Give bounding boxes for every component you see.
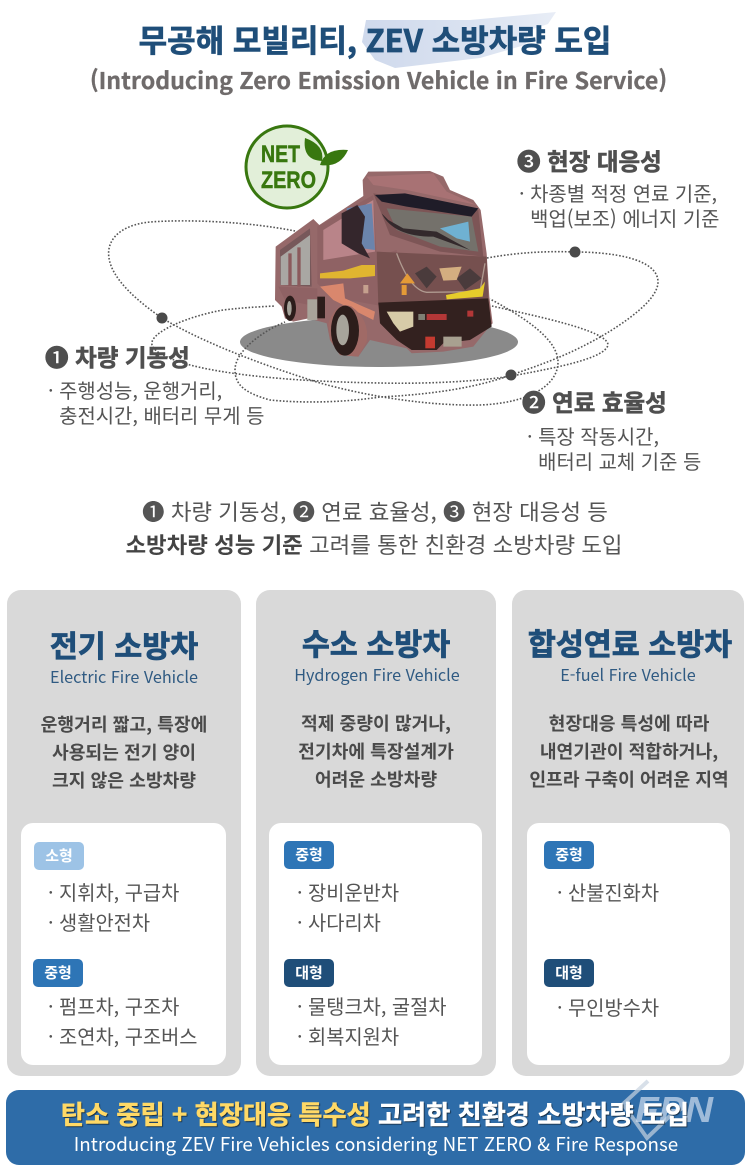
watermark logo: FPN	[635, 1089, 714, 1130]
tag: small: 소형	[45, 845, 73, 866]
e-fuel description: 현장대응 특성에 따라	[549, 710, 709, 736]
tag: large	[544, 959, 594, 987]
e-fuel large list: · 무인방수차	[557, 992, 659, 1021]
e-fuel subtitle: E-fuel Fire Vehicle	[560, 662, 696, 686]
electric description: 사용되는 전기 양이	[52, 739, 196, 765]
tag: medium: 중형	[44, 962, 72, 983]
tag: medium	[33, 959, 83, 987]
electric subtitle: Electric Fire Vehicle	[50, 664, 198, 688]
summary line 2: 소방차량 성능 기준 고려를 통한 친환경 소방차량 도입	[125, 528, 623, 560]
hydrogen list box	[269, 823, 482, 1065]
text 3: 백업(보조) 에너지 기준	[530, 202, 719, 232]
section 3: field response	[517, 143, 719, 232]
net zero badge	[246, 126, 348, 208]
hydrogen large list: · 물탱크차, 굴절차	[297, 991, 447, 1020]
e-fuel medium list: · 산불진화차	[557, 877, 659, 906]
diagram: orbits and fire truck	[108, 124, 659, 406]
text 1: · 주행성능, 운행거리,	[48, 375, 222, 404]
section 1: mobility	[45, 339, 264, 428]
orbit markers	[156, 246, 580, 380]
e-fuel description: 내연기관이 적합하거나,	[540, 738, 718, 764]
electric small list	[48, 877, 179, 936]
hydrogen description: 전기차에 특장설계가	[298, 738, 454, 764]
hydrogen medium list: · 사다리차	[297, 907, 381, 936]
section 2: fuel efficiency	[522, 384, 701, 474]
orbit paths	[109, 221, 658, 405]
net zero badge: ZERO	[261, 167, 316, 194]
tag: large: 대형	[295, 962, 323, 983]
text 1	[48, 375, 264, 428]
title: 무공해 모빌리티, ZEV 소방차량 도입	[139, 16, 611, 61]
text 3	[519, 178, 719, 232]
tag: medium	[284, 841, 334, 869]
e-fuel description: 인프라 구축이 어려운 지역	[529, 766, 729, 792]
electric small list: · 생활안전차	[48, 907, 150, 936]
heading 3: ❸ 현장 대응성	[517, 143, 662, 177]
tag: medium	[544, 841, 594, 869]
shadow ellipse	[240, 317, 518, 367]
e-fuel heading: 합성연료 소방차	[528, 620, 732, 664]
tag: large	[284, 959, 334, 987]
electric list box	[21, 823, 226, 1065]
watermark logo	[621, 1080, 714, 1141]
bottom banner	[6, 1090, 745, 1165]
panel: e-fuel	[512, 590, 744, 1076]
net zero badge: NET	[261, 141, 300, 168]
hydrogen heading: 수소 소방차	[302, 620, 450, 664]
text 3: · 차종별 적정 연료 기준,	[519, 178, 717, 207]
banner subtitle: Introducing ZEV Fire Vehicles considering NET ZERO & Fire Response	[74, 1130, 678, 1157]
tag: medium: 중형	[295, 844, 323, 865]
electric small list: · 지휘차, 구급차	[48, 877, 179, 906]
tag: small	[34, 842, 84, 870]
hydrogen medium list	[297, 877, 399, 936]
electric medium list: · 조연차, 구조버스	[48, 1021, 198, 1050]
hydrogen description: 적제 중량이 많거나,	[301, 710, 451, 736]
electric description: 크지 않은 소방차량	[52, 767, 196, 793]
e-fuel description	[529, 710, 729, 792]
electric description	[41, 711, 207, 793]
heading 2: ❷ 연료 효율성	[522, 384, 667, 418]
panel: electric	[7, 590, 241, 1076]
title highlight brush	[362, 12, 556, 68]
text 1: 충전시간, 배터리 무게 등	[59, 400, 264, 428]
electric medium list: · 펌프차, 구조차	[48, 991, 179, 1020]
fire truck	[275, 171, 493, 357]
hydrogen medium list: · 장비운반차	[297, 877, 399, 906]
text 2: 배터리 교체 기준 등	[538, 446, 701, 474]
tag: medium: 중형	[555, 844, 583, 865]
summary line 1: ❶ 차량 기동성, ❷ 연료 효율성, ❸ 현장 대응성 등	[142, 495, 608, 527]
text 2: · 특장 작동시간,	[527, 421, 659, 450]
electric medium list	[48, 991, 198, 1050]
hydrogen large list: · 회복지원차	[297, 1021, 399, 1050]
hydrogen description	[298, 710, 454, 792]
subtitle: (Introducing Zero Emission Vehicle in Fire Service)	[90, 62, 667, 96]
e-fuel list box	[527, 823, 730, 1065]
panel: hydrogen	[256, 590, 496, 1076]
heading 1: ❶ 차량 기동성	[45, 339, 190, 373]
tag: large: 대형	[555, 962, 583, 983]
electric heading: 전기 소방차	[50, 622, 198, 666]
hydrogen subtitle: Hydrogen Fire Vehicle	[294, 662, 460, 686]
hydrogen description: 어려운 소방차량	[315, 766, 437, 792]
electric description: 운행거리 짧고, 특장에	[41, 711, 207, 737]
banner headline: 탄소 중립 + 현장대응 특수성 고려한 친환경 소방차량 도입	[61, 1094, 689, 1132]
hydrogen large list	[297, 991, 447, 1050]
text 2	[527, 421, 701, 474]
